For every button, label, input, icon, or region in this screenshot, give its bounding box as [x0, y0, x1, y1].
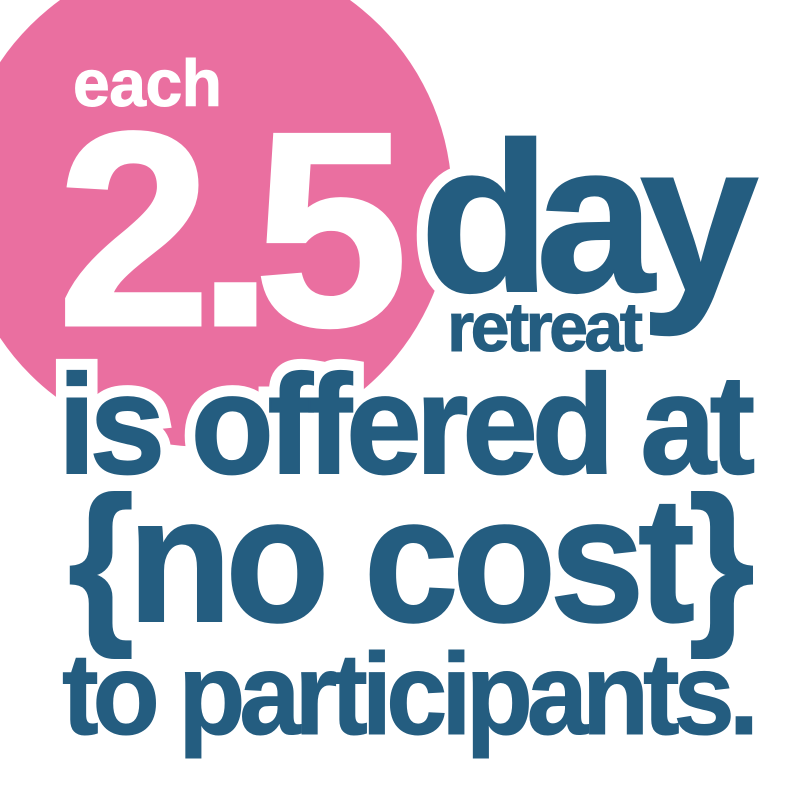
number: 2.5: 2.5	[57, 74, 408, 384]
line: is offered at: is offered at	[58, 346, 755, 504]
word: day: day	[420, 99, 758, 337]
pink circle	[0, 0, 452, 447]
word: retreat: retreat	[447, 288, 643, 366]
line: no cost in braces: {no cost}	[68, 459, 755, 659]
line: to participants: to participants.	[62, 629, 759, 759]
word: day: day	[420, 99, 758, 337]
word: each: each	[73, 46, 222, 120]
line: is offered at: is offered at	[58, 346, 755, 504]
